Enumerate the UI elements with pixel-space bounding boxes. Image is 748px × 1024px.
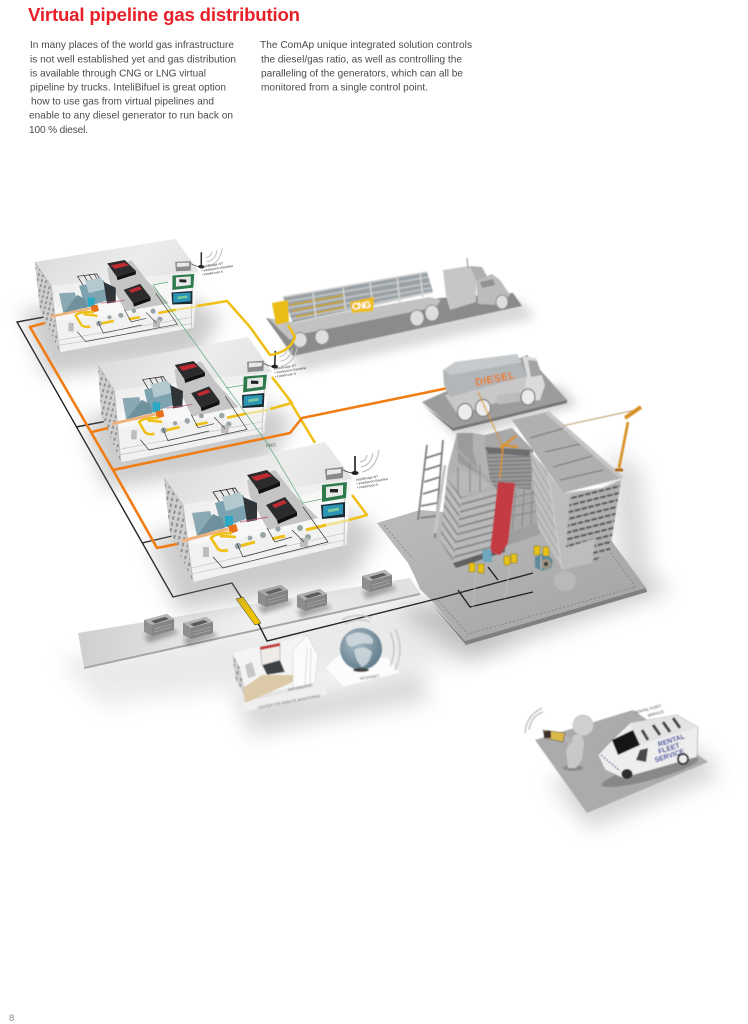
label — [255, 682, 321, 710]
road with generators — [78, 570, 420, 669]
van: RENTAL — [657, 733, 687, 749]
back massing — [440, 428, 538, 563]
van: FLEET — [658, 742, 681, 756]
wheels — [458, 389, 535, 420]
text block: right column: The ComAp unique integrated solution controls — [260, 40, 472, 51]
title: Virtual pipeline gas distribution — [28, 4, 300, 25]
diesel pipes: orange — [30, 323, 453, 548]
van: SERVICE — [654, 748, 686, 764]
CNG truck — [266, 258, 522, 356]
rental fleet service: RENTAL FLEET — [634, 704, 662, 715]
page number: 8 — [9, 1013, 14, 1024]
signal waves — [342, 615, 400, 670]
label: ENGINEERING — [288, 683, 313, 692]
controller labels: container 2 — [274, 362, 307, 379]
tube bundle — [283, 272, 433, 323]
CNG label: CNG — [352, 300, 372, 313]
generator 2 — [183, 617, 218, 646]
left scaffold — [418, 440, 443, 538]
tower crane — [562, 407, 641, 470]
generator 3 — [258, 585, 293, 614]
sphere — [554, 571, 576, 591]
deck and beam — [447, 470, 493, 497]
pipe label: CNG: CNG — [266, 442, 277, 448]
controller labels: container 3: InteliBridge-NT — [356, 474, 379, 482]
text block: left column: is available through CNG or LNG virtual — [30, 68, 206, 79]
controller labels: container 3: • InteliGen® Baseline — [356, 477, 389, 486]
laptop — [260, 643, 285, 675]
CNG label — [350, 297, 374, 313]
tank — [443, 354, 527, 397]
generator 1 — [144, 614, 179, 643]
text block: left column: 100 % diesel. — [29, 125, 88, 136]
right tower face — [592, 480, 621, 563]
gas pipes: yellow — [197, 301, 367, 520]
panel: construction site base plate — [377, 510, 647, 645]
power lines: black cabling — [17, 315, 533, 641]
text block: right column: the diesel/gas ratio, as well as controlling the — [261, 54, 462, 65]
rental fleet service: SERVICE — [647, 710, 665, 718]
controller labels: container 2: InteliBridge-NT — [274, 363, 297, 371]
building under construction — [418, 392, 641, 607]
desk — [243, 675, 293, 703]
controller labels: container 2: • InteliVision 5 — [275, 372, 297, 379]
person — [525, 708, 594, 771]
grating block — [485, 428, 533, 450]
controller labels: container 3: • InteliVision 5 — [357, 483, 379, 490]
chassis — [445, 376, 530, 415]
open frame right of hoist — [507, 488, 538, 540]
mid tower face — [530, 450, 562, 570]
yellow tank box — [272, 300, 289, 325]
internet globe — [325, 615, 400, 687]
container 1 — [22, 231, 222, 386]
text block: left column: pipeline by trucks. InteliBifuel is great option — [30, 82, 226, 94]
diesel truck — [422, 354, 567, 431]
monitoring centre — [232, 635, 327, 712]
text block: right column: paralleling of the generators, which can all be — [261, 68, 463, 79]
wheels — [293, 295, 508, 348]
text block: left column: how to use gas from virtual pipelines and — [31, 97, 214, 108]
blue generator units — [482, 549, 553, 571]
left face floors — [440, 478, 462, 563]
text block: right column — [260, 40, 472, 94]
text block: left column: enable to any diesel generator to run back on — [29, 111, 233, 122]
red hoist — [490, 482, 515, 555]
controller labels: container 1: • InteliGen® Baseline — [201, 264, 234, 273]
cab — [443, 258, 510, 310]
soft ground shadows — [60, 300, 720, 828]
tank: DIESEL — [474, 369, 516, 389]
generator 5 — [362, 570, 397, 599]
light masts — [469, 546, 549, 607]
text block: left column: is not well established yet and gas distribution — [30, 54, 236, 65]
front tower face — [548, 473, 602, 570]
van — [598, 715, 700, 793]
controller labels: container 1: • InteliVision 5 — [202, 270, 224, 277]
text block: left column: In many places of the world gas infrastructure — [30, 40, 234, 51]
internet globe: INTERNET — [359, 673, 380, 681]
front face floors — [453, 490, 498, 563]
yellow coupling on road — [236, 597, 261, 625]
container 3 — [150, 442, 379, 612]
controller labels: container 1: InteliBridge-NT — [201, 261, 224, 269]
text block: right column: monitored from a single control point. — [261, 82, 428, 94]
generator 4 — [297, 589, 332, 618]
signal lines: green — [153, 282, 322, 503]
controller labels: container 1 — [201, 260, 234, 277]
controller labels: container 3 — [356, 473, 389, 490]
room wall — [293, 635, 318, 688]
hoisting crane — [478, 392, 518, 478]
text block: left column — [29, 40, 236, 136]
rental fleet service — [525, 704, 708, 813]
label: CENTER FOR REMOTE MONITORING — [257, 694, 321, 710]
container 2 — [80, 331, 298, 496]
cab — [522, 356, 545, 402]
trailer — [268, 297, 441, 340]
controller labels: container 2: • InteliGen® Baseline — [274, 366, 307, 375]
roof — [512, 412, 622, 493]
